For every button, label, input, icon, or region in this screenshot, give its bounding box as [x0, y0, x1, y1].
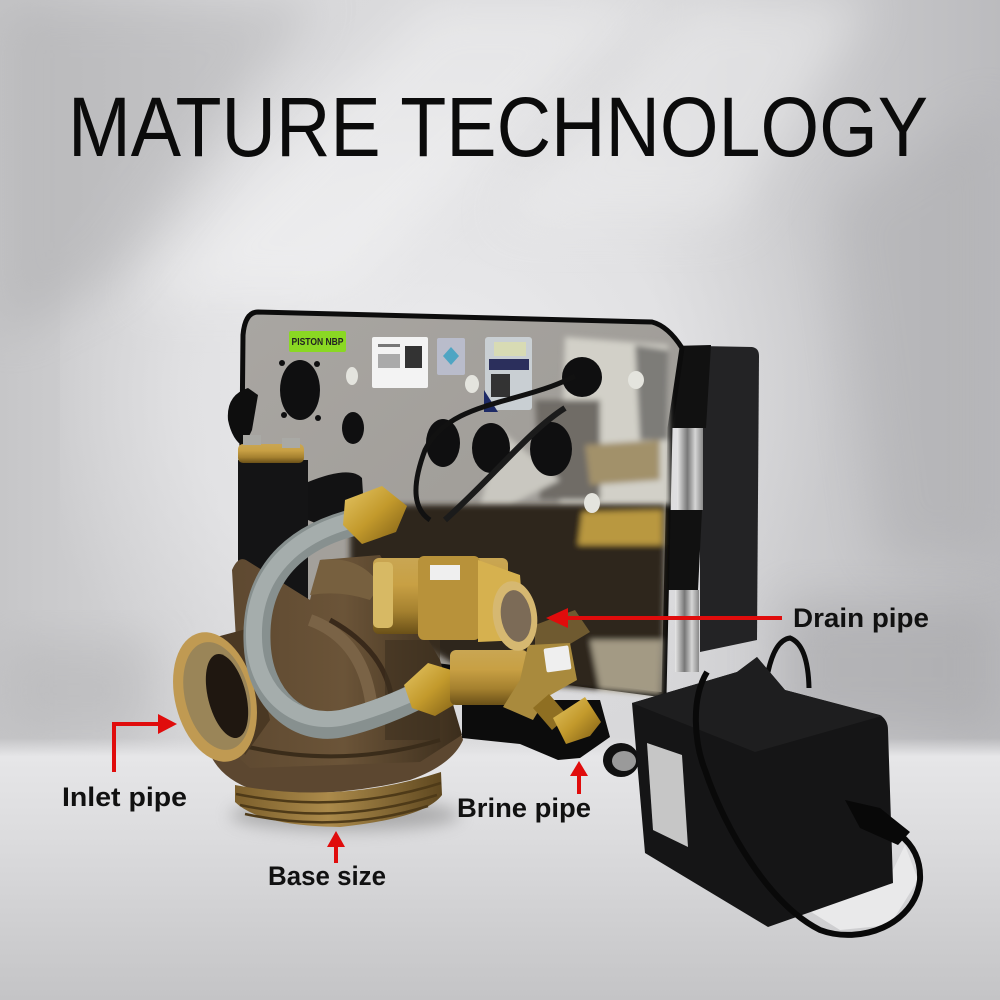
metal back plate with labels: [240, 312, 682, 695]
arrow: inlet pipe: [112, 714, 177, 772]
threaded base ring: [235, 772, 442, 827]
blue logo sticker: [437, 338, 465, 375]
callout: base size: Base size: [268, 861, 386, 891]
back cable loop: [768, 638, 809, 688]
drain port opening: [488, 578, 542, 654]
base flange: [212, 730, 463, 794]
product: softener control valve: [160, 312, 759, 831]
label: PISTON NBP: [289, 331, 346, 352]
power cable: [696, 672, 920, 935]
black bracket: [462, 700, 610, 760]
grey bypass hose: [254, 516, 423, 725]
plate rivets: [346, 367, 644, 513]
callout: drain pipe: [546, 603, 929, 633]
adapter body: [632, 657, 893, 927]
hose fittings: [343, 486, 462, 716]
callout: brine pipe: Brine pipe: [457, 793, 591, 823]
callout: inlet pipe: Inlet pipe: [62, 782, 187, 812]
callout: drain pipe: Drain pipe: [793, 603, 929, 633]
data sticker: [484, 337, 532, 412]
callout: base size: [268, 831, 386, 891]
callout: inlet pipe: [62, 714, 187, 812]
title: MATURE TECHNOLOGY: [68, 80, 928, 174]
white rating label: [372, 337, 428, 388]
black power wire on plate: [416, 376, 575, 520]
arrow: brine pipe: [570, 761, 588, 794]
floor reflection under cable: [800, 845, 918, 930]
power adapter: [632, 638, 920, 935]
adapter top face: [632, 657, 882, 752]
inlet port ring: [160, 623, 270, 771]
reflective mottled section: [480, 337, 670, 505]
black left clip: [228, 388, 258, 447]
ground shadow: [230, 799, 460, 831]
adapter sticker: [647, 743, 688, 847]
cable strain relief: [845, 800, 910, 845]
black side cover and hinges: [664, 345, 759, 672]
arrow: drain pipe: [546, 608, 782, 628]
label: PISTON NBP: PISTON NBP: [292, 336, 344, 348]
brass drain valve: [373, 556, 525, 642]
black motor column: [238, 435, 365, 600]
arrow: base size: [327, 831, 345, 863]
dark reflection of valve body: [350, 505, 665, 695]
plate holes: [279, 357, 602, 476]
small black ring foot: [603, 743, 639, 777]
brass brine fitting: [450, 643, 601, 744]
bronze valve body: [225, 555, 462, 768]
brass stub behind drain port: [535, 610, 590, 650]
callout: brine pipe: [457, 761, 591, 823]
